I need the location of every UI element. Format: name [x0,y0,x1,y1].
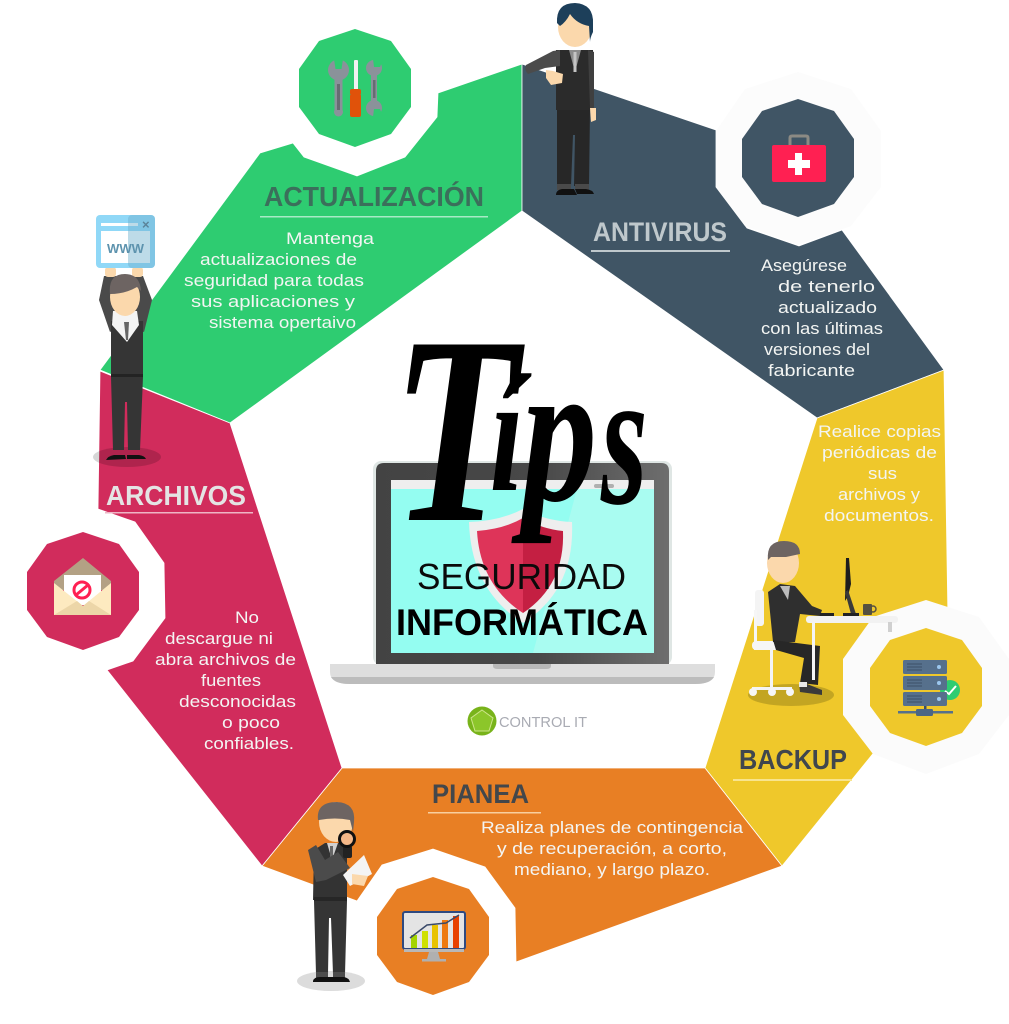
icon: shield [469,509,572,623]
text: planea body [481,819,744,879]
panel: antivirus [522,64,944,418]
title: Típs: T [392,281,525,578]
text: archivos body: abra archivos de [155,651,296,669]
text: backup body: Realice copias [818,423,941,441]
text: archivos body: o poco [222,714,280,732]
heading: backup: BACKUP [739,744,847,775]
text: backup body: archivos y [838,486,921,504]
figure: man leaning (antivirus) [525,3,596,195]
text: actualización body: actualizaciones de [200,251,357,269]
text: planea body: Realiza planes de contingencia [481,819,744,837]
title: Típs: í [490,340,532,527]
figure: man at desk (backup) [748,541,898,706]
panel: archivos [27,371,342,866]
text: archivos body: desconocidas [179,693,296,711]
text: backup body: periódicas de [822,444,937,462]
heading: pianea: PIANEA [432,779,529,809]
text: antivirus body: con las últimas [761,320,883,338]
text: archivos body: confiables. [204,735,294,753]
icon: www window: × [142,217,150,232]
icon: www window: WWW [107,241,145,256]
text: antivirus body: Asegúrese [761,257,847,275]
text: antivirus body: de tenerlo [778,278,875,296]
icon: magnifying glass [340,832,354,858]
heading: antivirus: ANTIVIRUS [593,217,727,247]
text: planea body: mediano, y largo plazo. [514,861,710,879]
heading: archivos: ARCHIVOS [106,480,246,511]
title: seguridad: SEGURIDAD [417,556,626,597]
text: actualización body: sistema opertaivo [209,314,356,332]
text: archivos body: No [235,609,259,627]
icon: first aid kit [742,99,854,217]
text: actualización body: Mantenga [286,230,375,248]
text: antivirus body: fabricante [768,362,855,380]
text: actualización body: sus aplicaciones y [191,293,356,311]
panel: planea [262,768,782,995]
text: antivirus body: versiones del [764,341,870,359]
heading: actualización: ACTUALIZACIÓN [264,181,484,212]
text: archivos body [155,609,296,753]
text: archivos body: descargue ni [165,630,273,648]
laptop with shield [330,461,715,684]
text: backup body: sus [868,465,897,483]
logo: control it [468,706,587,736]
figure: man with magnifying glass (planea) [297,802,372,991]
logo: control it: CONTROL IT [499,714,587,731]
icon: blocked envelope [27,532,139,650]
text: antivirus body [761,257,883,380]
figure: man holding www sign (archivos) [93,215,161,467]
icon: server [870,628,982,746]
text: backup body [818,423,941,525]
icon: monitor chart [377,877,489,995]
text: planea body: y de recuperación, a corto, [497,840,727,858]
text: backup body: documentos. [824,507,934,525]
panel: actualización [100,29,522,423]
title: Típs: s [600,331,648,546]
title: Típs: p [511,319,597,544]
text: archivos body: fuentes [201,672,261,690]
icon: tools [299,29,411,147]
text: actualización body: seguridad para todas [184,272,364,290]
icon: www window [96,215,155,268]
panel: backup [705,370,1009,866]
title: Típs [392,281,648,578]
text: actualización body [184,230,375,332]
text: antivirus body: actualizado [778,299,877,317]
title: informática: INFORMÁTICA [396,602,648,643]
